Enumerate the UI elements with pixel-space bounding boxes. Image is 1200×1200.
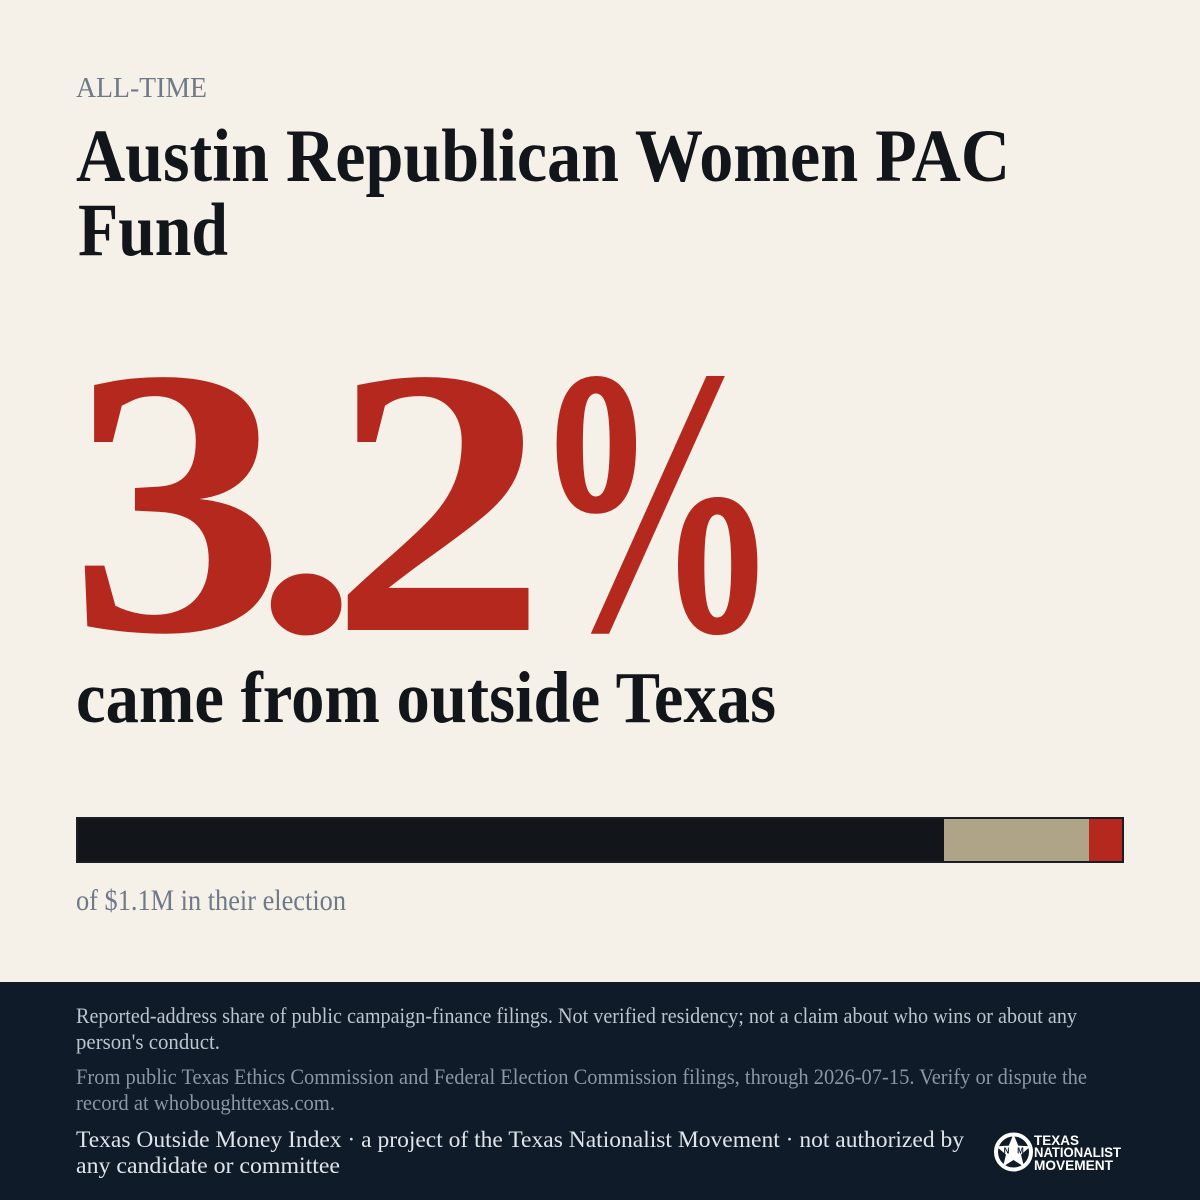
logo wordmark [1034, 1133, 1122, 1173]
footer: source note [76, 1064, 1087, 1115]
footer: project credit: Texas Outside Money Index · a project of the Texas Nationalist Movement · not authorized by [76, 1127, 964, 1152]
footer: source note: record at whoboughttexas.com. [76, 1090, 335, 1115]
eyebrow: time period: ALL-TIME [76, 72, 207, 104]
footer: methodology note [76, 1003, 1077, 1054]
footer panel [0, 982, 1200, 1200]
footer: source note: From public Texas Ethics Commission and Federal Election Commission filings, through 2026-07-15. Verify or dispute the [76, 1064, 1087, 1089]
logo wordmark: MOVEMENT [1034, 1158, 1114, 1173]
logo wordmark: TEXAS [1034, 1133, 1079, 1148]
footer: project credit [76, 1127, 964, 1178]
title: Austin Republican Women PAC [76, 115, 1010, 198]
statistic caption: came from outside Texas [76, 657, 776, 738]
title: Fund [78, 189, 228, 272]
big statistic: 3.2%: 3.2 [68, 290, 547, 713]
icon: star in circle: N [1004, 1146, 1010, 1156]
footer: methodology note: Reported-address share of public campaign-finance filings. Not verified residency; not a claim about who wins or about any [76, 1003, 1077, 1028]
footer: methodology note: person's conduct. [76, 1029, 220, 1054]
icon: star in circle [996, 1134, 1031, 1170]
icon: star in circle: M [1017, 1146, 1024, 1156]
bar caption: of $1.1M in their election [76, 884, 346, 917]
big statistic: 3.2% [68, 289, 781, 713]
logo: Texas Nationalist Movement [996, 1133, 1122, 1173]
big statistic: 3.2%: % [531, 289, 781, 713]
title [76, 115, 1010, 272]
footer: project credit: any candidate or committee [76, 1153, 340, 1178]
logo wordmark: NATIONALIST [1034, 1145, 1122, 1160]
stacked bar: share of money by origin [76, 817, 1124, 863]
